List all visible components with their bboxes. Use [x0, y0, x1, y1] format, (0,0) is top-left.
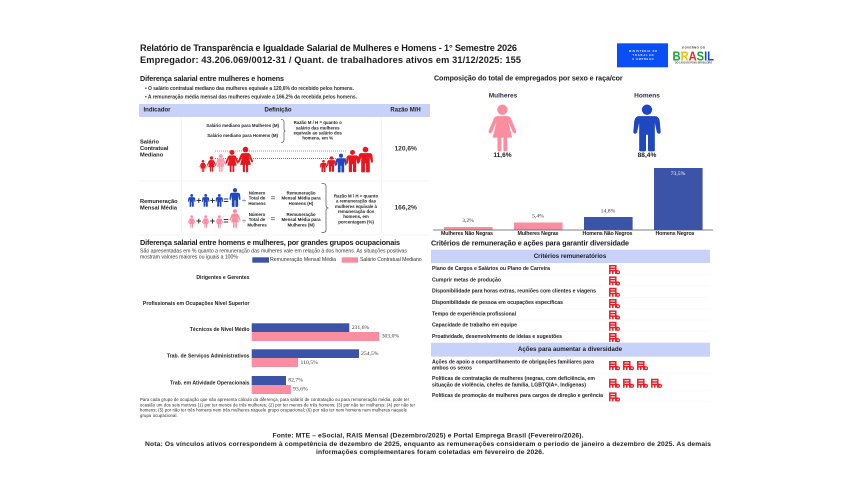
- row: remuneração mensal média: 166,2%: [395, 204, 417, 212]
- table: critérios remuneratórios: Plano de Cargos e Salários ou Plano de Carreira: [432, 266, 550, 272]
- bar chart: sexo e raça/cor: Mulheres Negras: [518, 231, 559, 237]
- footnote: grupo ocupacional.: [140, 413, 178, 418]
- row: salário contratual mediano: Salário mediano para Mulheres (M): [206, 123, 280, 128]
- bar chart: sexo e raça/cor: 3,2%: [462, 218, 474, 224]
- table: ações para diversidade: [431, 343, 710, 402]
- panel: diferença salarial: [139, 74, 430, 235]
- title: [140, 43, 521, 65]
- row: remuneração mensal média: Remuneração: [286, 212, 316, 217]
- row: remuneração mensal média: Total de: [249, 217, 266, 222]
- icon: fórmula homens: +: [196, 196, 201, 206]
- row: remuneração mensal média: Homens (H): [289, 201, 314, 206]
- row: remuneração mensal média: Mensal Média para: [281, 196, 321, 201]
- group: atividade operacionais: Trab. em Atividade Operacionais: [170, 380, 250, 386]
- table: ações para diversidade: Ações para aumentar a diversidade: [518, 346, 623, 353]
- footer note: [145, 432, 711, 456]
- footnote: [140, 397, 416, 418]
- icon: fórmula mulheres: +: [210, 216, 215, 226]
- description: [140, 248, 407, 260]
- icon: mulheres: [489, 92, 518, 159]
- row: remuneração mensal média: =: [271, 194, 276, 202]
- row: remuneração mensal média: Mensal Média para: [281, 217, 321, 222]
- table: critérios remuneratórios: [431, 250, 710, 342]
- group: serviços administrativos: 254,5%: [361, 351, 379, 357]
- heading: Diferença salarial entre homens e mulheres, por grandes grupos ocupacionais: [140, 238, 400, 247]
- group: atividade operacionais: 82,7%: [288, 378, 303, 384]
- row: remuneração mensal média: [140, 183, 417, 233]
- row: salário contratual mediano: 120,6%: [395, 146, 417, 152]
- group: serviços administrativos: Trab. de Serviços Administrativos: [167, 354, 250, 360]
- table: critérios remuneratórios: Critérios remuneratórios: [534, 253, 607, 260]
- footnote: Para cada grupo de ocupação que não apresenta cálculo da diferença, para salário de contratação ou para remuneração média, pode ter: [140, 397, 410, 402]
- logo: ministério: MINISTÉRIO DO: [629, 50, 657, 53]
- table: critérios remuneratórios: Disponibilidade de pessoa em ocupações específicas: [432, 300, 563, 306]
- footer note: Fonte: MTE – eSocial, RAIS Mensal (Dezembro/2025) e Portal Emprega Brasil (Fevereiro/2026).: [272, 432, 584, 440]
- logo: governo do brasil: GOVERNO DO: [682, 46, 706, 50]
- panel: critérios e ações: [431, 238, 710, 402]
- row: remuneração mensal média: homens, em: [343, 214, 369, 219]
- bullet text: • A remuneração média mensal das mulheres equivale a 166,2% da recebida pelos homens.: [145, 95, 358, 101]
- row: remuneração mensal média: a remuneração das: [336, 199, 377, 204]
- row: remuneração mensal média: Mensal Média: [140, 205, 178, 211]
- icon: mulheres: Mulheres: [489, 92, 518, 100]
- table: ações para diversidade: ambos os sexos: [432, 366, 472, 372]
- table: critérios remuneratórios: Capacidade de trabalho em equipe: [432, 323, 517, 329]
- table: ações para diversidade: Ações de apoio a compartilhamento de obrigações familiares para: [432, 359, 594, 365]
- row: remuneração mensal média: Mulheres: [247, 222, 267, 227]
- group: serviços administrativos: 110,5%: [300, 360, 318, 366]
- row: salário contratual mediano: equivale ao salário dos: [294, 130, 342, 136]
- icon: fórmula mulheres: =: [223, 216, 229, 226]
- group: técnicos: 303,0%: [382, 334, 399, 340]
- heading: Critérios de remuneração e ações para garantir diversidade: [431, 238, 629, 248]
- description: São apresentadas em % quanto a remuneração das mulheres vale em relação à dos homens. As situações positivas: [140, 248, 407, 254]
- row: salário contratual mediano: Salário mediano para Homens (M): [207, 133, 279, 138]
- legend: Salário Contratual Mediano: [360, 257, 422, 263]
- footnote: homens; (5) por não ter três homens nem três mulheres naquele grupo ocupacional; (6) por não ter nem homens nem mulheres naquele: [140, 408, 408, 413]
- icon: fórmula mulheres: [188, 209, 246, 228]
- row: remuneração mensal média: Número: [249, 190, 266, 196]
- icon: fórmula homens: ÷: [242, 196, 246, 205]
- logo: ministério: [617, 43, 668, 67]
- row: salário contratual mediano: [140, 120, 417, 172]
- description: mostram valores maiores ou iguais a 100%: [140, 254, 238, 260]
- row: salário contratual mediano: Mediano: [140, 153, 164, 159]
- table: Razão M/H: [390, 108, 421, 114]
- icon: fórmula mulheres: ÷: [242, 216, 246, 226]
- bar chart: grupos ocupacionais: [143, 275, 399, 394]
- table: ações para diversidade: Políticas de promoção de mulheres para cargos de direção e gerência: [432, 393, 603, 399]
- row: remuneração mensal média: porcentagem (%): [338, 219, 374, 224]
- footer note: informações complementares foram coletadas em fevereiro de 2026.: [316, 449, 544, 456]
- bar chart: sexo e raça/cor: Mulheres Não Negras: [441, 231, 493, 237]
- icon: fórmula mulheres: +: [196, 216, 201, 226]
- icon: fórmula homens: =: [223, 196, 229, 206]
- row: salário contratual mediano: Razão M / H = quanto o: [294, 120, 342, 125]
- icon: mulheres ordenadas por salário: [199, 147, 253, 172]
- row: remuneração mensal média: Homens: [248, 201, 266, 206]
- group: atividade operacionais: 93,6%: [293, 387, 308, 393]
- group: atividade operacionais: [170, 376, 308, 394]
- row: remuneração mensal média: Remuneração: [286, 190, 316, 196]
- panel: grupos ocupacionais: [140, 238, 422, 418]
- icon: homens: [633, 92, 661, 159]
- legend: Remuneração Mensal Média: [270, 257, 336, 263]
- row: salário contratual mediano: salário das mulheres: [296, 125, 340, 130]
- logo: ministério: E EMPREGO: [632, 58, 654, 61]
- table: [139, 104, 430, 235]
- icon: homens: Homens: [634, 92, 660, 100]
- table: ações para diversidade: situação de violência, chefes de família, LGBTQIA+, Indígenas): [432, 382, 586, 388]
- bar chart: sexo e raça/cor: 73,5%: [671, 171, 686, 177]
- bar chart: sexo e raça/cor: Homens Negros: [656, 231, 695, 237]
- logo: ministério: TRABALHO: [632, 54, 654, 57]
- table: Indicador: [143, 108, 171, 114]
- bar chart: grupos ocupacionais: Dirigentes e Gerentes: [196, 275, 250, 281]
- table: Definição: [264, 108, 292, 114]
- icon: homens ordenados por salário: [320, 147, 373, 172]
- group: técnicos: [190, 323, 399, 341]
- row: remuneração mensal média: mulheres equivale à: [335, 204, 378, 209]
- group: serviços administrativos: [167, 349, 379, 367]
- logo: governo do brasil: BRASIL: [672, 48, 714, 63]
- bar chart: sexo e raça/cor: [433, 168, 713, 237]
- footnote: ocasião um dos seis motivos (1) por ter menos de três mulheres; (2) por ter menos de três homens; (3) por não ter mulheres; (4) por não ter: [140, 402, 416, 408]
- group: técnicos: Técnicos de Nível Médio: [190, 327, 250, 333]
- icons: critérios: [610, 266, 619, 342]
- table: critérios remuneratórios: Proatividade, desenvolvimento de ideias e sugestões: [432, 334, 562, 340]
- bar chart: sexo e raça/cor: 5,4%: [532, 214, 544, 220]
- bar chart: sexo e raça/cor: Homens Não Negros: [582, 231, 633, 237]
- table: critérios remuneratórios: Tempo de experiência profissional: [432, 311, 517, 317]
- heading: Diferença salarial entre mulheres e homens: [140, 74, 284, 83]
- icon: homens: 88,4%: [638, 152, 656, 159]
- row: remuneração mensal média: Mulheres (M): [287, 222, 315, 227]
- table: critérios remuneratórios: Disponibilidade para horas extras, reuniões com clientes e viagens: [432, 289, 596, 295]
- panel: composição: [433, 74, 713, 237]
- group: técnicos: 231,6%: [352, 325, 369, 331]
- bullet text: • O salário contratual mediano das mulheres equivale a 120,6% do recebido pelos homens.: [145, 86, 355, 92]
- row: salário contratual mediano: homens, em %: [302, 136, 333, 141]
- logo: governo do brasil: DO LADO DO POVO BRASILEIRO: [675, 62, 712, 64]
- legend: [252, 257, 422, 263]
- icons: ações: [610, 362, 661, 401]
- row: remuneração mensal média: Total de: [249, 196, 266, 201]
- footer note: Nota: Os vínculos ativos correspondem à competência de dezembro de 2025, enquanto as remunerações consideram o período de janeiro a dezembro de 2025. As demais: [145, 441, 711, 448]
- bullet text: [145, 86, 358, 101]
- row: remuneração mensal média: Razão M / H = quanto: [334, 194, 378, 198]
- row: remuneração mensal média: remuneração dos: [338, 209, 375, 214]
- bar chart: sexo e raça/cor: 14,8%: [601, 208, 616, 214]
- row: remuneração mensal média: Remuneração: [140, 199, 178, 205]
- row: remuneração mensal média: =: [271, 214, 276, 224]
- row: salário contratual mediano: Salário: [140, 140, 159, 146]
- icon: mulheres: 11,6%: [493, 152, 512, 159]
- table: ações para diversidade: Políticas de contratação de mulheres (negras, com deficiência, em: [432, 376, 595, 382]
- title: Relatório de Transparência e Igualdade Salarial de Mulheres e Homens - 1° Semestre 2026: [140, 43, 517, 53]
- icon: fórmula homens: [188, 188, 246, 207]
- bar chart: grupos ocupacionais: Profissionais em Ocupações Nível Superior: [143, 301, 250, 307]
- row: remuneração mensal média: Número: [249, 212, 266, 217]
- table: critérios remuneratórios: Cumprir metas de produção: [432, 277, 501, 283]
- heading: Composição do total de empregados por sexo e raça/cor: [434, 74, 623, 82]
- row: salário contratual mediano: Contratual: [140, 146, 169, 152]
- title: Empregador: 43.206.069/0012-31 / Quant. de trabalhadores ativos em 31/12/2025: 155: [140, 55, 521, 65]
- icon: fórmula homens: +: [210, 196, 215, 206]
